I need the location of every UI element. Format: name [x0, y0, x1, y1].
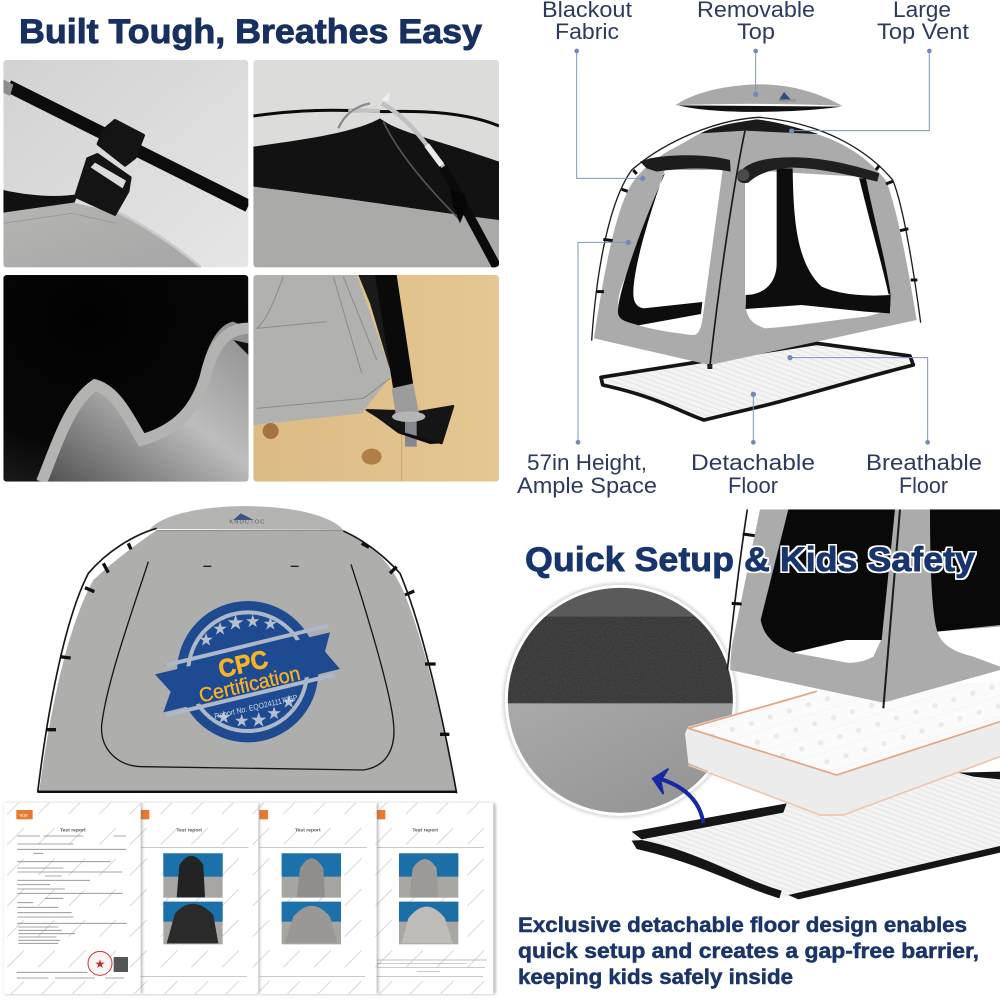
- stars: ★: [281, 692, 296, 712]
- window: left: [618, 170, 723, 335]
- label: Blackout Fabric: [542, 0, 632, 44]
- icon: removable top: KNOCTOC: [779, 98, 797, 102]
- arrow: floor to close-up: [653, 769, 703, 823]
- document page 4: [377, 803, 495, 994]
- icon: velcro close-up circle: [500, 583, 740, 820]
- document page 2: [141, 803, 259, 994]
- label: Detachable Floor: [691, 450, 815, 498]
- document page 1: Test report: [60, 827, 86, 833]
- window: right: [745, 168, 891, 328]
- panel: test report documents: [4, 803, 495, 994]
- stars: ★: [198, 630, 214, 650]
- stars: ★: [266, 703, 282, 723]
- stars: ★: [250, 710, 268, 732]
- label: Removable Top: [697, 0, 815, 44]
- icon: mattress: [685, 682, 1000, 815]
- stars: ★: [263, 614, 278, 634]
- stars: ★: [245, 611, 260, 631]
- stars: ★: [216, 707, 231, 727]
- panel: black fabric with gray hem close-up: [3, 275, 248, 482]
- badge: CPC certification: [155, 601, 340, 742]
- document page 3: Test report: [295, 827, 321, 833]
- text block: floor design description: [518, 914, 979, 989]
- stars: ★: [212, 618, 228, 638]
- badge: CPC certification: Report No: EQO24111706P: [214, 693, 298, 721]
- label: Detachable Floor: Detachable: [691, 450, 815, 475]
- stars: ★: [226, 611, 245, 634]
- label: Removable Top: Top: [737, 19, 775, 44]
- rolled door fabric: [640, 155, 731, 172]
- label: Blackout Fabric: Fabric: [555, 19, 619, 44]
- document page 1: [4, 803, 142, 994]
- badge: CPC certification: CPC: [216, 645, 271, 684]
- icon: removable top: [675, 84, 843, 112]
- document page 1: ★: [95, 957, 105, 971]
- label: 57in Height, Ample Space: [517, 450, 657, 498]
- label: 57in Height, Ample Space: Ample Space: [517, 473, 657, 498]
- badge: CPC certification: Certification: [197, 663, 303, 707]
- icon: floor mat: [632, 772, 1000, 899]
- title: Built Tough, Breathes Easy: Built Tough, Breathes Easy: [19, 13, 482, 51]
- panel: hub and top vent close-up: [253, 60, 499, 267]
- leader lines: [574, 49, 932, 445]
- text block: floor design description: quick setup and creates a gap-free barrier,: [518, 940, 979, 963]
- document page 3: [259, 803, 378, 994]
- document page 1: aqa: [19, 812, 28, 818]
- label: Breathable Floor: [866, 450, 982, 498]
- panel: tent diagram with callouts: [574, 49, 932, 445]
- panel: front tent with CPC certification: [38, 506, 457, 793]
- panel: pole and buckle close-up: [3, 60, 248, 267]
- label: Large Top Vent: Top Vent: [877, 19, 969, 44]
- icon: tent front: KNOCTOC: [229, 520, 264, 526]
- label: Breathable Floor: Floor: [899, 473, 948, 498]
- text block: floor design description: keeping kids safely inside: [518, 966, 793, 989]
- icon: floor mat: [601, 343, 913, 420]
- label: 57in Height, Ample Space: 57in Height,: [527, 450, 647, 475]
- stars: [198, 611, 296, 732]
- heading: Quick Setup & Kids Safety: Quick Setup & Kids Safety: [525, 541, 975, 579]
- panel: ground stake on wood close-up: [253, 275, 499, 482]
- label: Large Top Vent: [877, 0, 969, 44]
- text block: floor design description: Exclusive detachable floor design enables: [518, 914, 967, 937]
- icon: tent front: [38, 506, 457, 793]
- document page 2: Test report: [176, 827, 202, 833]
- panel: detail photo grid: [3, 60, 499, 482]
- document page 4: Test report: [412, 827, 438, 833]
- icon: tent frame and body: [592, 117, 921, 369]
- label: Detachable Floor: Floor: [728, 473, 778, 498]
- stars: ★: [234, 711, 249, 731]
- panel: quick setup diagram: [500, 509, 1000, 899]
- icon: tent lower section: [727, 509, 1000, 708]
- label: Breathable Floor: Breathable: [866, 450, 982, 475]
